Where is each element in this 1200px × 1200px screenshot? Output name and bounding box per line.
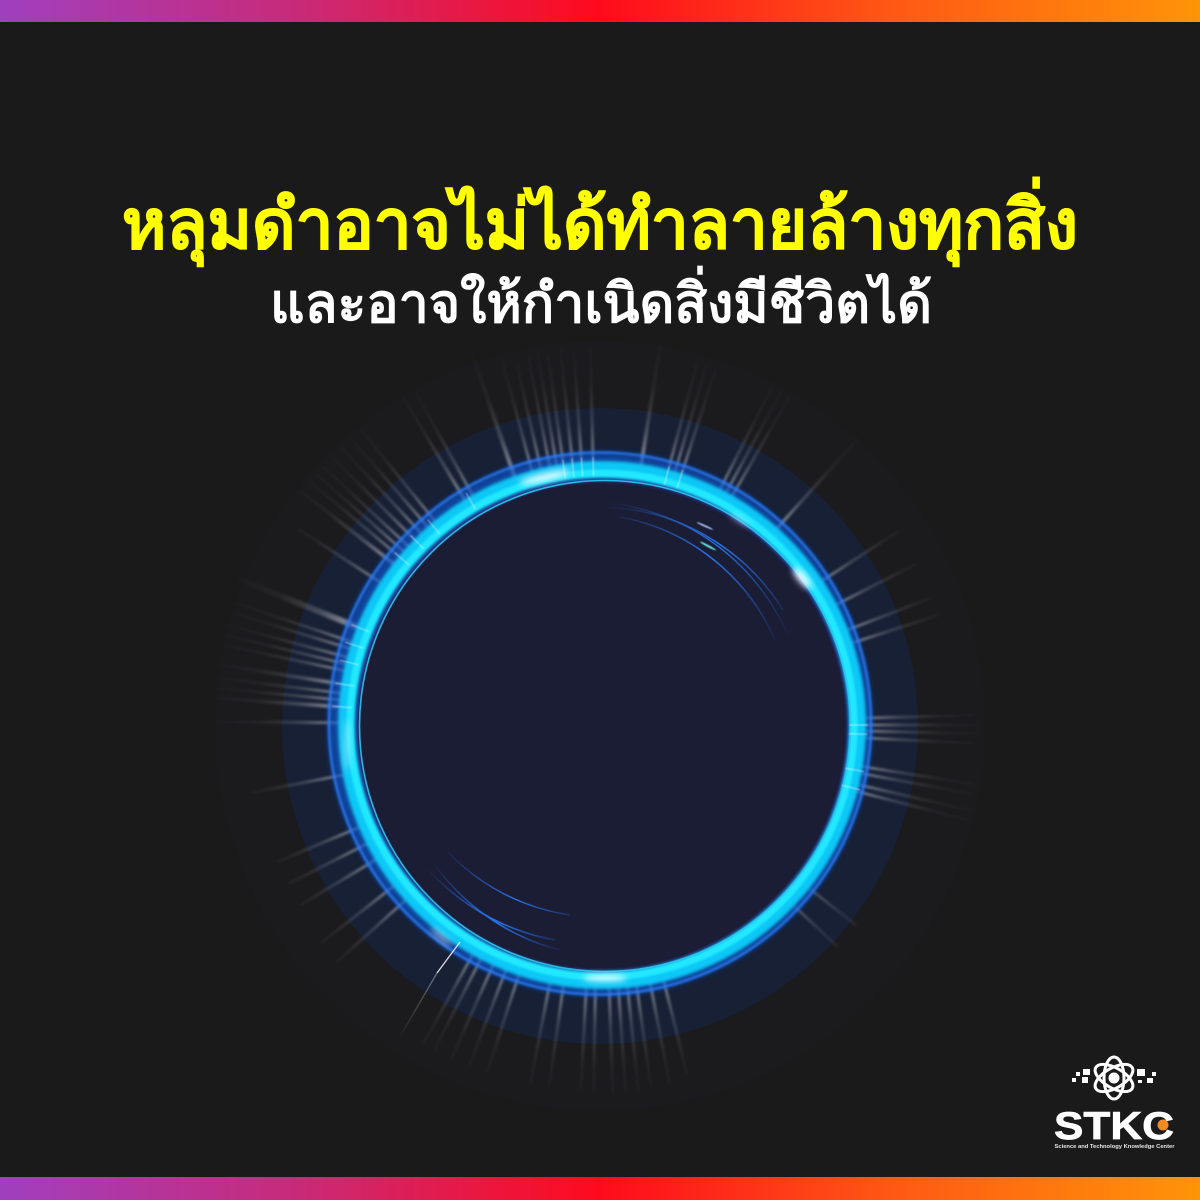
inner streaks upper right [600,503,790,640]
streak glints [696,521,716,551]
orange dot [1158,1120,1168,1130]
outer faint halo [215,341,985,1111]
streak core [437,942,460,973]
inner streaks lower left [420,850,570,950]
outer blue line [329,452,871,994]
logo: STKC [1054,1057,1175,1150]
logo tagline: Science and Technology Knowledge Center [1054,1144,1175,1150]
inner disc [356,479,850,973]
outer blue glow [336,460,864,988]
dark blue inner shadow [356,479,850,973]
blue halo disc [282,408,918,1044]
black hole illustration [205,341,985,1111]
light rays [205,345,980,1095]
icon: atom [1091,1057,1137,1099]
bright streak lower left [398,942,460,1040]
bright cyan core [350,473,854,977]
title: หลุมดำอาจไม่ได้ทำลายล้างทุกสิ่ง [122,176,1078,267]
pixel squares [1072,1069,1156,1083]
streak tail [398,973,437,1040]
white highlights [345,468,813,981]
logo wordmark: STKC [1054,1105,1174,1148]
ray tips over ring [333,457,868,790]
top gradient bar [0,0,1200,22]
subtitle: และอาจให้กำเนิดสิ่งมีชีวิตได้ [270,265,932,334]
thin inner cyan line [360,480,850,972]
bottom gradient bar [0,1177,1200,1200]
main cyan ring [346,470,858,980]
